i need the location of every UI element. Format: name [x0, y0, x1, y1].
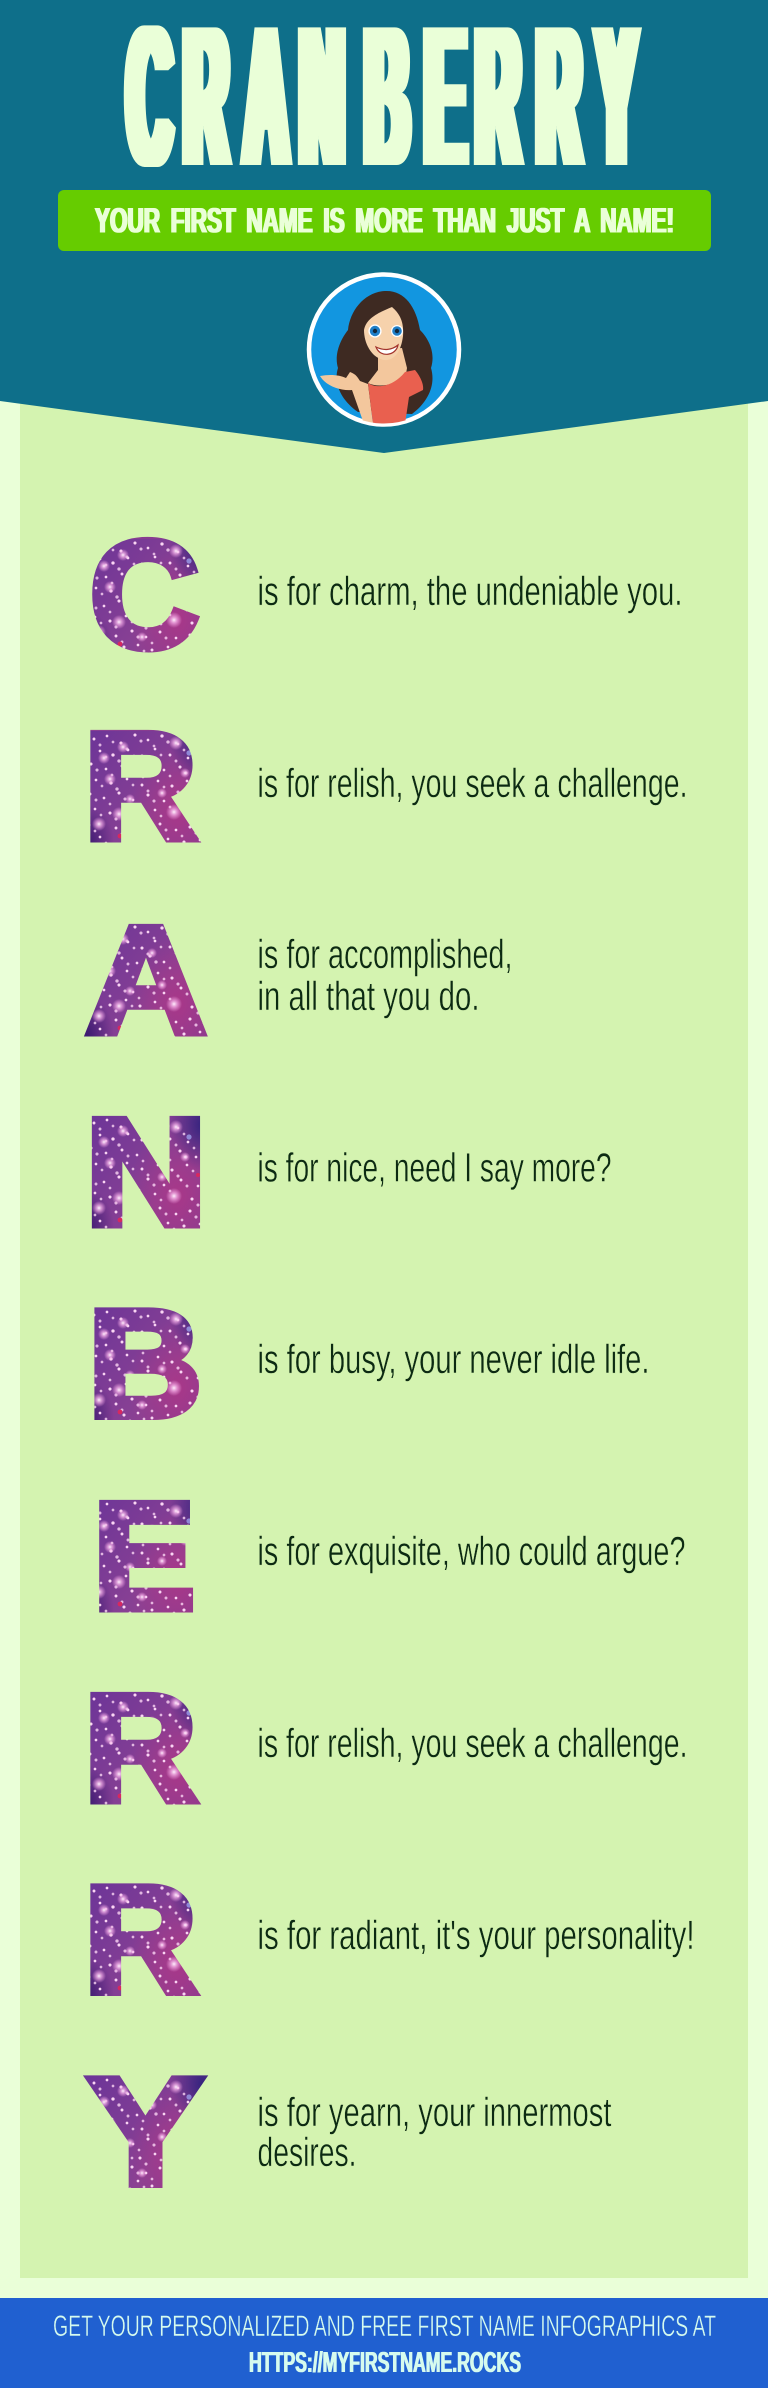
row: C [90, 510, 682, 680]
row: E: E [93, 1472, 195, 1642]
row: B [88, 1279, 650, 1449]
subtitle bar [58, 190, 711, 251]
row: A: A [86, 896, 206, 1066]
row: N [85, 1088, 612, 1258]
row: Y [88, 2047, 612, 2217]
header banner [0, 0, 768, 453]
row: R: R [84, 1855, 197, 2025]
row: Y: is for yearn, your innermost [258, 2089, 612, 2135]
row: A: in all that you do. [258, 973, 480, 1019]
row: A [86, 896, 512, 1066]
row: B: B [88, 1279, 202, 1449]
row: R [84, 702, 688, 872]
footer [0, 2298, 768, 2388]
row: R: R [84, 1664, 197, 1834]
footer: HTTPS://MYFIRSTNAME.ROCKS [249, 2347, 521, 2379]
row: C: C [90, 510, 199, 680]
row: Y: desires. [258, 2129, 356, 2175]
mouth [376, 345, 398, 354]
row: R [84, 1855, 694, 2025]
eyes [368, 324, 382, 338]
content panel [20, 380, 748, 2278]
row: E [93, 1472, 686, 1642]
row: Y: Y [88, 2047, 203, 2217]
neck and chest [368, 348, 407, 386]
row: R [84, 1664, 688, 1834]
face [364, 307, 403, 360]
icon: avatar woman [309, 274, 459, 424]
shirt [368, 370, 423, 424]
row: N: N [85, 1088, 207, 1258]
row: A: is for accomplished, [258, 931, 512, 977]
row: R: R [84, 702, 197, 872]
row: N: is for nice, need I say more? [258, 1144, 612, 1190]
hair [337, 291, 433, 414]
arm and hand [320, 372, 373, 424]
